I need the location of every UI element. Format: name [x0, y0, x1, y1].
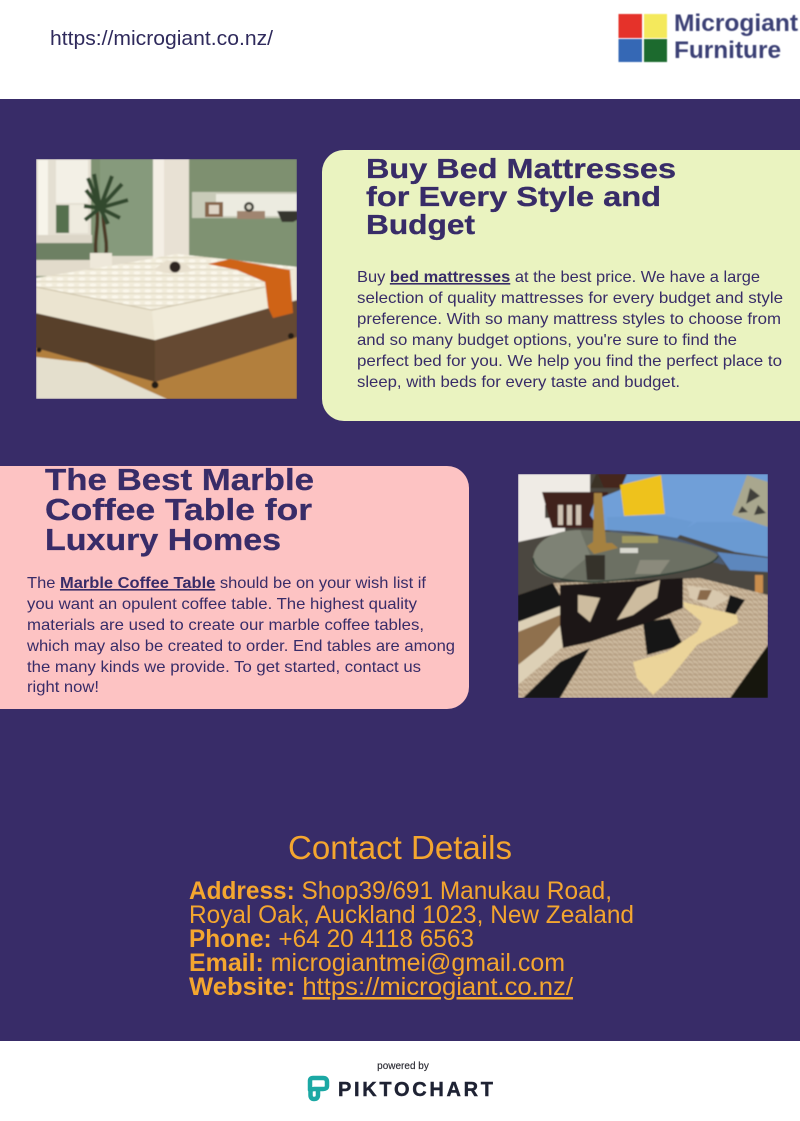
table base [560, 578, 683, 648]
text block: coffee table: you want an opulent coffee table. The highest quality [27, 596, 417, 613]
text block: mattresses: preference. With so many mattress styles to choose from [357, 311, 781, 328]
text block: coffee table: which may also be created to order. End tables are among [26, 638, 455, 655]
footer: piktochart [310, 1061, 493, 1101]
orange throw [208, 259, 293, 318]
footer: piktochart: PIKTOCHART [338, 1079, 493, 1101]
rug [518, 578, 768, 698]
contact details: Phone: +64 20 4118 6563 [189, 925, 474, 953]
heading: coffee table [45, 462, 314, 557]
text block: mattresses: and so many budget options, you're sure to find the [357, 332, 737, 349]
text block: mattresses [357, 269, 783, 391]
text block: coffee table: the many kinds we provide. To get started, contact us [27, 659, 421, 676]
mattress [72, 261, 297, 340]
heading: mattresses: Buy Bed Mattresses [366, 153, 676, 184]
text block: mattresses: Buy bed mattresses at the best price. We have a large [357, 269, 760, 286]
heading: coffee table: The Best Marble [45, 462, 314, 497]
blue sofa [590, 474, 768, 530]
icon: piktochart logo [310, 1078, 327, 1099]
bed base [36, 313, 156, 383]
text block: coffee table: right now! [27, 679, 99, 696]
pillows on bed [153, 260, 193, 274]
yellow cushion [620, 475, 665, 516]
contact details: Royal Oak, Auckland 1023, New Zealand [189, 901, 634, 929]
website url: https://microgiant.co.nz/ [50, 28, 273, 50]
text block: coffee table [26, 575, 455, 696]
patterned cushion [732, 475, 768, 527]
contact details: Address: Shop39/691 Manukau Road, [189, 877, 612, 905]
photo: bed with mattress [36, 159, 297, 399]
glass top [533, 530, 718, 582]
wooden leg [633, 602, 738, 695]
contact details: Website: https://microgiant.co.nz/ [189, 973, 573, 1001]
floor [36, 336, 297, 399]
panel: coffee table [0, 462, 469, 709]
panel: mattresses [322, 150, 800, 421]
window [36, 159, 92, 243]
text block: mattresses: perfect bed for you. We help you find the perfect place to [357, 353, 782, 370]
photo: glass coffee table [518, 474, 768, 698]
text block: mattresses: selection of quality mattresses for every budget and style [357, 290, 783, 307]
plant [84, 174, 128, 268]
text block: mattresses: sleep, with beds for every taste and budget. [357, 374, 680, 391]
footer: piktochart: powered by [377, 1061, 429, 1072]
contact heading: Contact Details [288, 829, 512, 866]
wall shelf [192, 192, 297, 222]
side table [597, 474, 627, 488]
logo: Microgiant [674, 10, 798, 37]
white armchair [518, 474, 590, 542]
contact details: Email: microgiantmei@gmail.com [189, 949, 565, 977]
heading: coffee table: Coffee Table for [45, 492, 312, 527]
heading: mattresses [366, 153, 676, 240]
contact section [189, 829, 634, 1001]
column [163, 159, 190, 257]
statue [587, 493, 618, 554]
text block: coffee table: The Marble Coffee Table should be on your wish list if [27, 575, 427, 592]
heading: mattresses: for Every Style and [366, 181, 661, 212]
logo: Furniture [674, 37, 781, 64]
heading: mattresses: Budget [366, 209, 475, 240]
text block: coffee table: materials are used to create our marble coffee tables, [27, 617, 424, 634]
heading: coffee table: Luxury Homes [45, 522, 281, 557]
logo [618, 10, 798, 64]
contact details [189, 877, 634, 1001]
